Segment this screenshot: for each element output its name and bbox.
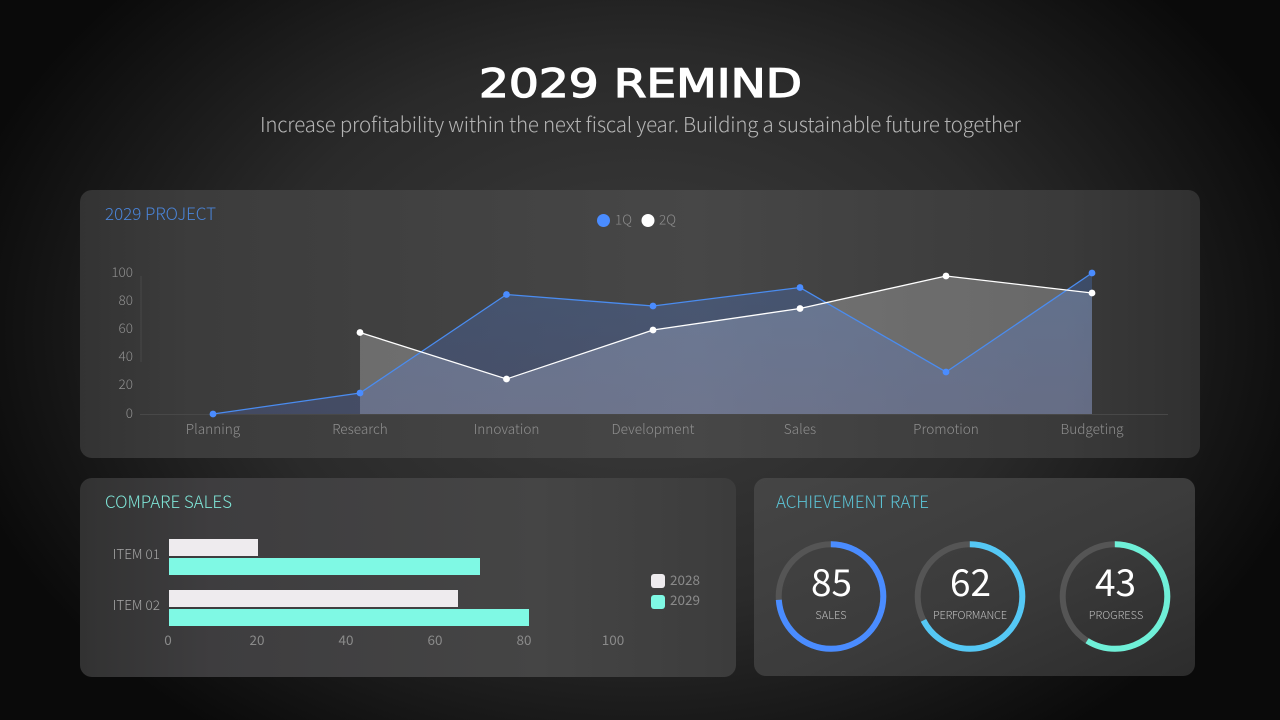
ring: performance 62: 62 xyxy=(950,553,991,607)
ring: progress 43: 43 xyxy=(1095,553,1136,607)
heading: achievement rate: ACHIEVEMENT RATE xyxy=(776,488,929,513)
y axis labels: 20 xyxy=(119,373,133,393)
ring: progress 43: PROGRESS xyxy=(1089,607,1143,623)
bar chart: 100 xyxy=(602,629,624,649)
y axis labels: 60 xyxy=(119,317,133,337)
bar chart: ITEM 01 xyxy=(113,543,160,563)
heading: compare sales: COMPARE SALES xyxy=(105,488,232,513)
area chart: 1Q fill xyxy=(213,273,1092,414)
panel: 2029 project xyxy=(80,190,1200,458)
ring: sales 85: SALES xyxy=(815,607,847,623)
line: 1Q series xyxy=(210,270,1095,417)
legend: years: 2029 xyxy=(670,589,700,609)
area chart: 2Q fill xyxy=(360,276,1092,414)
x axis labels: Innovation xyxy=(474,418,539,438)
subtitle: Increase profitability within the next fiscal year. Building a sustainable future together xyxy=(260,108,1022,138)
line: 2Q series xyxy=(357,273,1095,382)
bar chart xyxy=(113,539,624,649)
y axis labels: 40 xyxy=(119,345,133,365)
x axis labels: Promotion xyxy=(913,418,979,438)
bar chart: 20 xyxy=(250,629,264,649)
y axis labels: 100 xyxy=(111,261,133,281)
panel: compare sales xyxy=(80,478,736,677)
legend: quarters: 2Q xyxy=(659,208,676,228)
legend: quarters xyxy=(597,208,676,228)
y axis labels: 0 xyxy=(126,402,133,422)
x axis labels xyxy=(186,418,1124,438)
bar chart: 80 xyxy=(516,629,532,649)
x axis labels: Development xyxy=(612,418,695,438)
legend: years xyxy=(651,569,700,609)
bar chart: 60 xyxy=(428,629,442,649)
bar chart: 0 xyxy=(164,629,172,649)
heading: 2029 project: 2029 PROJECT xyxy=(105,200,216,225)
ring: performance 62: PERFORMANCE xyxy=(933,607,1007,623)
bar chart: ITEM 02 xyxy=(113,594,160,614)
ring: progress 43 xyxy=(1063,544,1167,649)
x axis labels: Research xyxy=(332,418,388,438)
legend: quarters: 1Q xyxy=(615,208,632,228)
ring: sales 85: 85 xyxy=(811,553,852,607)
ring: sales 85 xyxy=(779,544,883,649)
bar chart: 40 xyxy=(338,629,354,649)
y axis labels: 80 xyxy=(119,289,133,309)
x axis labels: Sales xyxy=(784,418,816,438)
x axis labels: Planning xyxy=(186,418,241,438)
title: 2029 REMIND xyxy=(479,62,802,107)
legend: years: 2028 xyxy=(670,569,700,589)
x axis labels: Budgeting xyxy=(1060,418,1124,438)
ring: performance 62 xyxy=(918,544,1022,649)
y axis labels xyxy=(111,261,133,422)
panel: achievement rate xyxy=(754,478,1195,676)
